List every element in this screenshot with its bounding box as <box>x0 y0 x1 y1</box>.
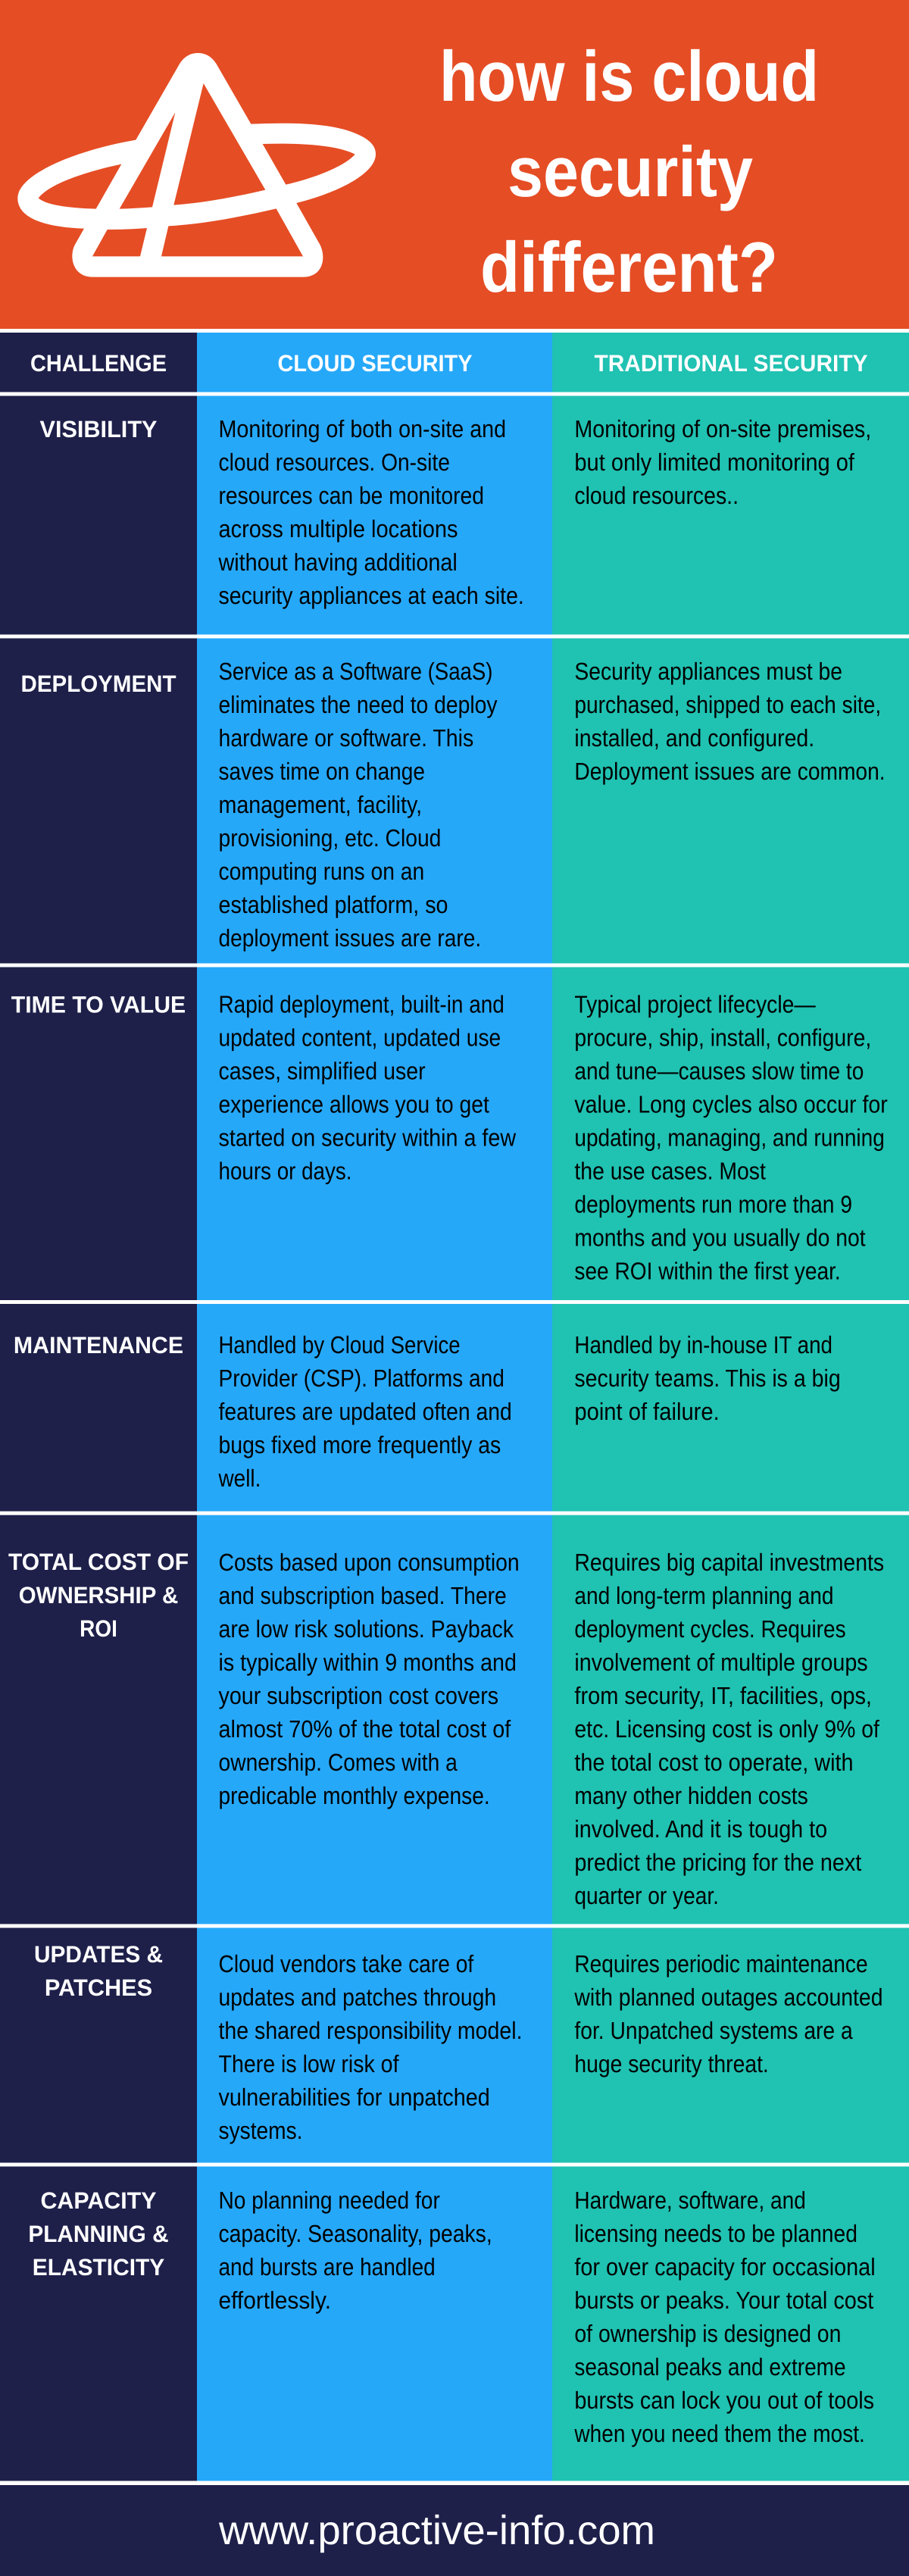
traditional security text: total cost: many other hidden costs <box>574 1782 808 1809</box>
cloud security text: deployment: deployment issues are rare. <box>218 924 481 952</box>
cloud security text: total cost: and subscription based. There <box>218 1582 507 1609</box>
traditional security text: deployment: Security appliances must be <box>574 658 842 685</box>
traditional security text: updates: Requires periodic maintenance <box>574 1950 868 1977</box>
row label: capacity planning and elasticity: PLANNING & <box>28 2221 169 2247</box>
row: visibility <box>39 415 871 609</box>
row: total cost of ownership and ROI <box>8 1549 884 1909</box>
traditional security text: deployment: installed, and configured. <box>574 724 814 752</box>
traditional security text: time to value: procure, ship, install, configure, <box>574 1024 871 1052</box>
row label: total cost of ownership and ROI: TOTAL COST OF <box>8 1549 189 1575</box>
traditional security text: capacity: bursts or peaks. Your total cost <box>574 2287 873 2314</box>
cloud security text: visibility: resources can be monitored <box>218 482 484 509</box>
traditional security text: capacity: seasonal peaks and extreme <box>574 2353 846 2381</box>
cloud security text: maintenance: Provider (CSP). Platforms and <box>218 1365 504 1392</box>
traditional security text: time to value <box>574 991 888 1285</box>
cloud security text: time to value: Rapid deployment, built-in and <box>218 991 504 1018</box>
cloud security text: time to value: started on security within a few <box>218 1124 517 1152</box>
row: capacity planning and elasticity <box>28 2187 876 2447</box>
cloud security text: deployment: Service as a Software (SaaS) <box>218 658 492 685</box>
cloud security text: capacity: capacity. Seasonality, peaks, <box>218 2220 492 2247</box>
title: different? <box>480 227 778 307</box>
traditional security text: total cost <box>574 1549 884 1909</box>
row label: maintenance: MAINTENANCE <box>14 1332 183 1358</box>
cloud security text: time to value: updated content, updated use <box>218 1024 501 1052</box>
traditional security text: total cost: deployment cycles. Requires <box>574 1615 846 1643</box>
cloud security text: visibility: across multiple locations <box>218 515 458 542</box>
traditional security text: capacity: of ownership is designed on <box>574 2320 841 2347</box>
cloud security text: deployment: management, facility, <box>218 791 422 818</box>
cloud security text: total cost: is typically within 9 months and <box>218 1649 517 1676</box>
cloud security text: updates <box>218 1950 523 2144</box>
cloud security text: updates: There is low risk of <box>218 2050 399 2077</box>
title: how is cloud <box>439 36 819 116</box>
traditional security text: visibility <box>574 415 871 509</box>
cloud security text: visibility: security appliances at each site. <box>218 582 524 609</box>
column headings <box>30 350 868 377</box>
footer <box>0 2485 909 2576</box>
row label: visibility: VISIBILITY <box>39 416 158 442</box>
row: updates and patches <box>34 1941 883 2144</box>
traditional security text: total cost: and long-term planning and <box>574 1582 833 1609</box>
cloud security text: time to value <box>218 991 517 1185</box>
cloud security text: total cost: ownership. Comes with a <box>218 1749 458 1776</box>
cloud security text: updates: the shared responsibility model. <box>218 2017 523 2044</box>
cloud security text: deployment: saves time on change <box>218 758 425 785</box>
header banner <box>0 0 909 330</box>
row label: capacity planning and elasticity <box>28 2187 169 2281</box>
traditional security text: time to value: Typical project lifecycle— <box>574 991 816 1018</box>
cloud security text: deployment: eliminates the need to deploy <box>218 691 497 718</box>
row label: updates and patches: PATCHES <box>45 1974 152 2001</box>
row label: total cost of ownership and ROI <box>8 1549 189 1642</box>
cloud security text: total cost: predicable monthly expense. <box>218 1782 490 1809</box>
row label: capacity planning and elasticity: CAPACITY <box>41 2187 157 2214</box>
traditional security text: updates: huge security threat. <box>574 2050 769 2077</box>
cloud security text: updates: vulnerabilities for unpatched <box>218 2084 490 2111</box>
row label: capacity planning and elasticity: ELASTICITY <box>33 2254 165 2281</box>
cloud security text: maintenance: bugs fixed more frequently as <box>218 1431 501 1458</box>
cloud security text: time to value: cases, simplified user <box>218 1058 426 1085</box>
traditional security text: visibility: but only limited monitoring of <box>574 449 854 476</box>
cloud security text: capacity <box>218 2187 492 2314</box>
cloud security text: total cost: your subscription cost covers <box>218 1682 498 1709</box>
traditional security text: deployment <box>574 658 886 785</box>
cloud security text: deployment: established platform, so <box>218 891 448 918</box>
cloud security text: maintenance: well. <box>218 1465 261 1492</box>
traditional security text: time to value: months and you usually do not <box>574 1224 866 1252</box>
cloud security text: maintenance: features are updated often and <box>218 1398 512 1425</box>
row label: updates and patches: UPDATES & <box>34 1941 163 1968</box>
traditional security text: capacity: for over capacity for occasional <box>574 2253 876 2281</box>
traditional security text: maintenance: Handled by in-house IT and <box>574 1331 832 1358</box>
traditional security text: total cost: from security, IT, facilities, ops, <box>574 1682 872 1709</box>
row: maintenance <box>14 1331 841 1492</box>
traditional security text: capacity: when you need them the most. <box>574 2420 865 2447</box>
footer url: www.proactive-info.com <box>218 2508 655 2553</box>
traditional security text: visibility: cloud resources.. <box>574 482 739 509</box>
cloud security text: updates: updates and patches through <box>218 1984 496 2011</box>
column headings: TRADITIONAL SECURITY <box>594 350 868 377</box>
cloud security text: total cost <box>218 1549 520 1809</box>
row: time to value <box>11 991 888 1285</box>
traditional security text: time to value: deployments run more than 9 <box>574 1191 852 1218</box>
traditional security text: updates: for. Unpatched systems are a <box>574 2017 853 2044</box>
cloud security text: capacity: effortlessly. <box>218 2287 331 2314</box>
cloud security text: capacity: No planning needed for <box>218 2187 440 2214</box>
cloud security text: deployment: computing runs on an <box>218 858 424 885</box>
cloud security text: total cost: almost 70% of the total cost of <box>218 1715 511 1743</box>
icon: triangle and orbit logo <box>17 53 376 277</box>
traditional security text: time to value: the use cases. Most <box>574 1158 766 1185</box>
cloud security text: deployment: provisioning, etc. Cloud <box>218 824 441 852</box>
traditional security text: updates <box>574 1950 883 2077</box>
row label: deployment: DEPLOYMENT <box>21 671 176 697</box>
title <box>439 36 819 307</box>
traditional security text: total cost: the total cost to operate, with <box>574 1749 853 1776</box>
cloud security text: visibility <box>218 415 524 609</box>
traditional security text: capacity: bursts can lock you out of tools <box>574 2387 874 2414</box>
cloud security text: total cost: Costs based upon consumption <box>218 1549 520 1576</box>
traditional security text: capacity: Hardware, software, and <box>574 2187 806 2214</box>
traditional security text: maintenance <box>574 1331 841 1425</box>
row label: total cost of ownership and ROI: ROI <box>80 1615 117 1642</box>
cloud security text: time to value: experience allows you to get <box>218 1091 489 1118</box>
cloud security text: capacity: and bursts are handled <box>218 2253 436 2281</box>
cloud security text: updates: Cloud vendors take care of <box>218 1950 473 1977</box>
column headings: CHALLENGE <box>30 350 167 377</box>
traditional security text: visibility: Monitoring of on-site premises, <box>574 415 871 442</box>
traditional security text: total cost: predict the pricing for the next <box>574 1849 861 1876</box>
traditional security text: capacity <box>574 2187 876 2447</box>
traditional security text: time to value: see ROI within the first year. <box>574 1258 841 1285</box>
cloud security text: deployment <box>218 658 497 952</box>
row label: total cost of ownership and ROI: OWNERSHIP & <box>19 1582 178 1608</box>
title: security <box>508 132 753 211</box>
traditional security text: maintenance: security teams. This is a big <box>574 1365 841 1392</box>
traditional security text: total cost: involvement of multiple groups <box>574 1649 868 1676</box>
row label: updates and patches <box>34 1941 163 2001</box>
row label: time to value: TIME TO VALUE <box>11 991 186 1018</box>
cloud security text: time to value: hours or days. <box>218 1158 351 1185</box>
traditional security text: total cost: involved. And it is tough to <box>574 1815 827 1843</box>
traditional security text: maintenance: point of failure. <box>574 1398 720 1425</box>
cloud security text: updates: systems. <box>218 2117 303 2144</box>
row: deployment <box>21 658 886 952</box>
cloud security text: maintenance: Handled by Cloud Service <box>218 1331 461 1358</box>
cloud security text: maintenance <box>218 1331 512 1492</box>
cloud security text: deployment: hardware or software. This <box>218 724 473 752</box>
traditional security text: total cost: quarter or year. <box>574 1882 719 1909</box>
traditional security text: total cost: etc. Licensing cost is only 9% of <box>574 1715 879 1743</box>
cloud security text: total cost: are low risk solutions. Payback <box>218 1615 514 1643</box>
cloud security text: visibility: without having additional <box>218 549 458 576</box>
cloud security text: visibility: Monitoring of both on-site and <box>218 415 506 442</box>
cloud security text: visibility: cloud resources. On-site <box>218 449 450 476</box>
traditional security text: capacity: licensing needs to be planned <box>574 2220 857 2247</box>
traditional security text: time to value: and tune—causes slow time to <box>574 1058 864 1085</box>
column headings: CLOUD SECURITY <box>277 350 473 377</box>
